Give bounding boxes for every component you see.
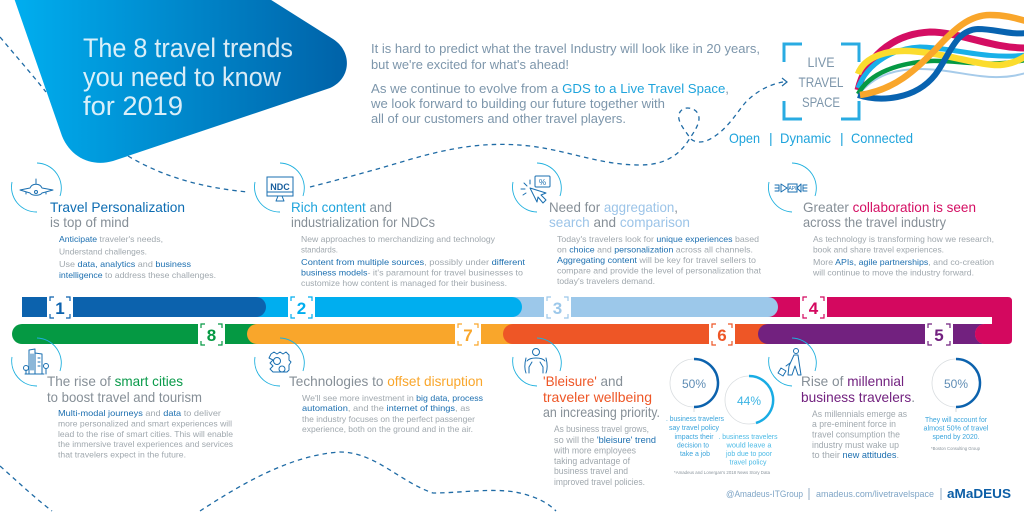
body text: the industry focuses on the perfect passenger [302,414,475,424]
icon: traveler with suitcase [769,338,816,386]
tagline: | [840,130,844,146]
footer [726,487,1011,501]
body text: to their new attitudes. [812,450,899,461]
donut: 44% [725,376,773,424]
icon: NDC monitor [254,163,304,212]
body text: Today's travelers look for unique experiences based [557,234,759,244]
intro text: but we're excited for what's ahead! [371,58,569,72]
panel 4: collaboration [768,163,994,278]
panel 7: offset disruption [255,338,483,434]
panel 5: millennials [769,338,989,461]
body text: industry must wake up [812,440,899,451]
heading: business travelers. [801,389,915,405]
tagline [729,130,913,146]
body text: travel consumption the [812,430,900,440]
ribbons [858,15,1024,98]
body text: more personalized and smart experiences will [58,418,232,428]
stat caption: 50% [666,414,724,458]
body text: the immersive travel experiences and services [58,439,233,449]
badge 5 [925,322,953,346]
intro text [370,42,760,126]
body text: lead to the rise of smart cities. This will enable [58,429,233,439]
live travel space frame [784,44,859,119]
live travel space frame: TRAVEL [798,74,844,90]
heading [291,199,435,230]
stat caption: 50%: say travel policy [669,423,719,432]
body text: compare and provide the level of personalization that [557,266,762,276]
body text: with more employees [553,446,636,456]
stat caption: 44% [718,432,778,466]
donut: 50% [670,359,718,412]
heading [50,199,185,230]
heading: Need for aggregation, [549,199,678,215]
logo: aMaDEUS [947,487,1011,501]
body text [812,409,907,461]
body text: will continue to move the industry forward. [812,268,974,278]
panel 3: aggregation [512,163,762,286]
body text: that travelers expect in the future. [58,450,186,460]
footer: @Amadeus-ITGroup [726,489,803,500]
body text [812,234,994,278]
intro text: As we continue to evolve from a GDS to a Live Travel Space , [371,82,729,96]
badge 1: 1 [55,299,65,318]
body text: automation , and the internet of things , as [302,403,470,413]
heading: The rise of smart cities [47,373,183,389]
icon: city [12,338,61,386]
heading: Travel Personalization [50,199,185,215]
badge 8 [198,322,225,346]
heading: across the travel industry [803,214,946,230]
heading: traveler wellbeing [543,389,652,405]
body text: taking advantage of [554,456,630,467]
stat caption: 44%: . business travelers [718,432,778,441]
icon: cursor and percent tag [512,163,561,212]
body text: Understand challenges. [59,246,147,256]
badge 3 [544,295,571,319]
body text [302,393,483,434]
body text: standards. [301,244,338,254]
heading [543,373,660,420]
intro text: all of our customers and other travel players. [371,112,626,126]
body text: on choice and personalization across all channels. [557,244,753,254]
body text: Aggregating content will be key for travel sellers to [557,255,756,265]
tagline: Connected [851,130,913,146]
tagline: Open [729,130,760,146]
heading: search and comparison [549,214,690,230]
heading [549,199,690,230]
body text: a pre-eminent force in [812,419,896,430]
body text: As technology is transforming how we research, [813,234,994,244]
heading: an increasing priority. [543,404,660,420]
body text: Content from multiple sources , possibly under different [301,257,526,267]
donut: 50% [932,359,980,412]
icon: gear circuit [255,338,304,386]
body text: improved travel policies. [554,477,645,488]
body text: As millennials emerge as [812,409,907,420]
donut: 50%: 50% [682,377,706,391]
intro text: we look forward to building our future together with [370,97,665,111]
heading: Greater collaboration is seen [803,199,976,215]
panel 8: smart cities [12,338,233,460]
badge 8: 8 [207,326,216,345]
body text: intelligence to address these challenges. [59,270,216,280]
tagline: Dynamic [780,130,831,146]
badge 1 [47,295,73,319]
stat caption: They will account for [925,415,987,424]
body text [59,234,216,280]
dashed route: top left [0,37,787,192]
live travel space frame: LIVE [808,54,834,70]
body text [553,424,656,488]
donut: 44%: 44% [737,394,761,408]
badge 7 [455,322,481,346]
body text: today's travelers demand. [557,276,655,286]
icon: API connector [768,163,816,212]
stat caption: 50%: decision to [677,440,709,450]
source note: *Amadeus and Lonergan's 2018 News Story Data [674,470,770,475]
heading: Rich content and [291,199,392,215]
body text: As business travel grows, [554,424,649,435]
icon: NDC monitor: NDC [270,182,290,192]
footer: amadeus.com/livetravelspace [816,489,934,500]
dashed route: bottom [0,452,556,511]
body text: so will the 'bleisure' trend [554,435,656,446]
heading: is top of mind [50,214,129,230]
badge 7: 7 [463,326,473,345]
badge 3: 3 [553,299,562,318]
badge 2 [288,295,315,319]
body text: business travel and [554,466,628,477]
stat caption: 50%: impacts their [674,432,714,441]
heading [801,373,915,405]
body text [58,408,233,460]
stat caption [924,415,989,441]
title panel [14,0,347,163]
body text: New approaches to merchandizing and technology [301,234,496,244]
badge 6 [709,322,735,346]
panel 2: rich content [254,163,526,288]
title: you need to know [83,62,281,92]
stat caption: 50%: take a job [680,449,710,458]
heading [47,373,202,405]
body text [557,234,762,286]
icon: cursor and percent tag: % [539,178,546,187]
live travel space frame: SPACE [802,94,840,110]
body text: Use data, analytics and business [59,259,191,269]
heading: to boost travel and tourism [47,389,202,405]
badge 5: 5 [934,326,944,345]
icon: airplane [11,163,61,212]
body text: Multi-modal journeys and data to deliver [58,408,221,418]
heading [803,199,976,230]
badge 2: 2 [297,299,306,318]
title: The 8 travel trends [83,33,293,63]
body text: Anticipate traveler's needs, [59,234,163,244]
heading: Rise of millennial [801,373,904,389]
intro text: It is hard to predict what the travel Industry will look like in 20 years, [371,42,760,56]
body text: book and share travel experiences. [813,244,944,254]
stat caption: 44%: job due to poor [725,449,772,458]
body text: business models - it's paramount for travel businesses to [301,268,523,278]
timeline bars [12,295,1012,346]
stat caption: spend by 2020. [932,432,980,441]
stat caption: 50%: . business travelers [666,414,724,423]
stat caption: 44%: would leave a [726,440,772,450]
badge 4 [800,295,827,319]
body text: experience, both on the ground and in the air. [302,424,473,434]
badge 4: 4 [809,299,819,318]
number badges [47,295,953,346]
body text: customize how content is managed for their business. [301,278,507,288]
icon: API connector: API [788,186,797,192]
body text: More APIs, agile partnerships , and co-creation [813,257,994,267]
body text [301,234,526,288]
panel 1: travel personalization [11,163,216,280]
title [83,33,293,121]
donut: 50%: 50% [944,377,968,391]
heading: 'Bleisure' and [543,373,623,389]
heading: industrialization for NDCs [291,214,435,230]
stat caption: 44%: travel policy [730,458,767,466]
panel 6: bleisure [513,338,778,488]
badge 6: 6 [717,326,727,345]
icon: hands and person [513,338,561,386]
title: for 2019 [83,91,183,121]
heading: Technologies to offset disruption [289,373,483,389]
source note: *Boston Consulting Group [931,446,980,451]
stat caption: almost 50% of travel [924,424,989,432]
body text: We'll see more investment in big data, process [302,393,483,403]
tagline: | [769,130,773,146]
